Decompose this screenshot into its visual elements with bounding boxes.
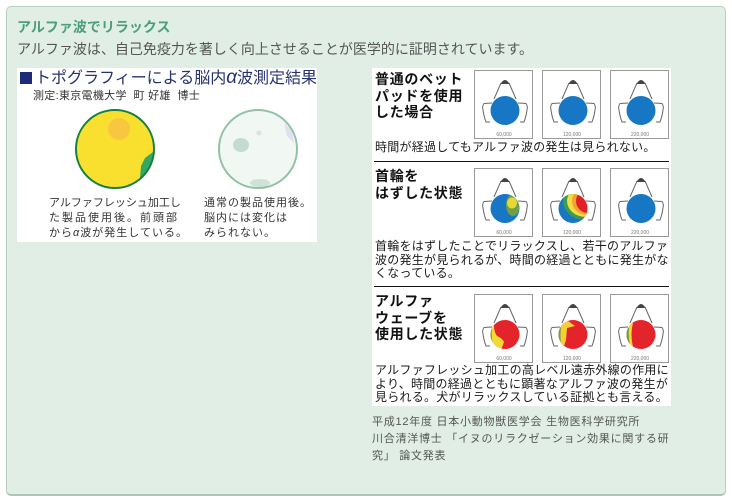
row title: パッドを使用: [375, 88, 463, 104]
row description: 首輪をはずしたことでリラックスし、若干のアルファ: [375, 239, 668, 253]
row description: 時間が経過してもアルファ波の発生は見られない。: [375, 140, 656, 154]
row title: 使用した状態: [375, 326, 463, 342]
thumbnail: 220,000: 220,000: [631, 230, 649, 236]
row title: ウェーブを: [375, 310, 448, 326]
topography title: トポグラフィーによる脳内α波測定結果: [35, 67, 317, 88]
row title: はずした状態: [375, 184, 463, 200]
thumbnail: 120,000: [542, 294, 600, 362]
divider: [374, 286, 669, 287]
thumbnail: 60,000: 60,000: [496, 356, 512, 362]
caption: treated product: アルファフレッシュ加工し: [49, 197, 181, 209]
row description: くなっている。: [375, 266, 460, 280]
row description: [375, 239, 669, 280]
thumbnail: 60,000: 60,000: [496, 132, 512, 138]
row title: 普通のベット: [375, 71, 463, 87]
row title: [375, 168, 463, 200]
intro text: アルファ波は、自己免疫力を著しく向上させることが医学的に証明されています。: [17, 41, 533, 57]
thumbnail: 220,000: [610, 168, 668, 236]
thumbnail: 120,000: 120,000: [563, 132, 581, 138]
caption: normal product: [204, 196, 312, 239]
thumbnail: 120,000: 120,000: [563, 230, 581, 236]
icon: pale brain map: [219, 110, 297, 188]
brain map thumbnails: [474, 294, 669, 363]
caption: normal product: 通常の製品使用後。: [204, 197, 312, 209]
brain map thumbnails: [474, 168, 669, 237]
caption: normal product: 脳内には変化は: [204, 212, 288, 224]
divider: [374, 161, 669, 162]
row description: より、時間の経過とともに顕著なアルファ波の発生が: [375, 376, 668, 390]
topography title square: [20, 72, 32, 84]
row title: した場合: [375, 104, 434, 120]
row title: 首輪を: [375, 168, 419, 184]
source note: [372, 416, 669, 462]
row: normal pet pad: [375, 70, 669, 154]
row description: 波の発生が見られるが、時間の経過とともに発生がな: [375, 252, 669, 266]
row: alpha wave product: [375, 293, 669, 404]
thumbnail: 60,000: [474, 294, 532, 362]
caption: treated product: からα波が発生している。: [49, 227, 188, 239]
row title: [375, 293, 463, 342]
caption: treated product: た製品使用後。前頭部: [49, 212, 179, 224]
thumbnail: 220,000: 220,000: [631, 356, 649, 362]
row description: アルファフレッシュ加工の高レベル遠赤外線の作用に: [375, 363, 669, 377]
topography circles: [75, 109, 298, 189]
panel: topography result: [17, 68, 317, 242]
heading: アルファ波でリラックス: [17, 19, 170, 35]
source note: 川合清洋博士 「イヌのリラクゼーション効果に関する研: [372, 433, 669, 445]
caption: normal product: みられない。: [204, 227, 276, 239]
thumbnail: 60,000: 60,000: [496, 230, 512, 236]
thumbnail: 220,000: 220,000: [631, 132, 649, 138]
thumbnail: 220,000: [610, 70, 668, 138]
row title: [375, 71, 463, 120]
caption: treated product: [49, 196, 188, 239]
thumbnail: 60,000: [474, 70, 532, 138]
panel: EEG comparison: [372, 68, 671, 406]
thumbnail: 60,000: [474, 168, 532, 236]
thumbnail: 120,000: 120,000: [563, 356, 581, 362]
thumbnail: 120,000: [542, 168, 607, 236]
source note: 究」 論文発表: [372, 450, 446, 462]
row: collar removed: [375, 168, 669, 280]
brain map thumbnails: [474, 70, 669, 139]
row title: アルファ: [375, 293, 434, 309]
source note: 平成12年度 日本小動物獣医学会 生物医科学研究所: [372, 416, 640, 428]
measurement credit: 測定:東京電機大学 町 好雄 博士: [33, 90, 200, 102]
thumbnail: 220,000: [610, 294, 668, 362]
thumbnail: 120,000: [542, 70, 600, 138]
row description: [375, 363, 669, 404]
icon: yellow brain map: [76, 110, 157, 188]
row description: 見られる。犬がリラックスしている証拠とも言える。: [375, 390, 668, 404]
